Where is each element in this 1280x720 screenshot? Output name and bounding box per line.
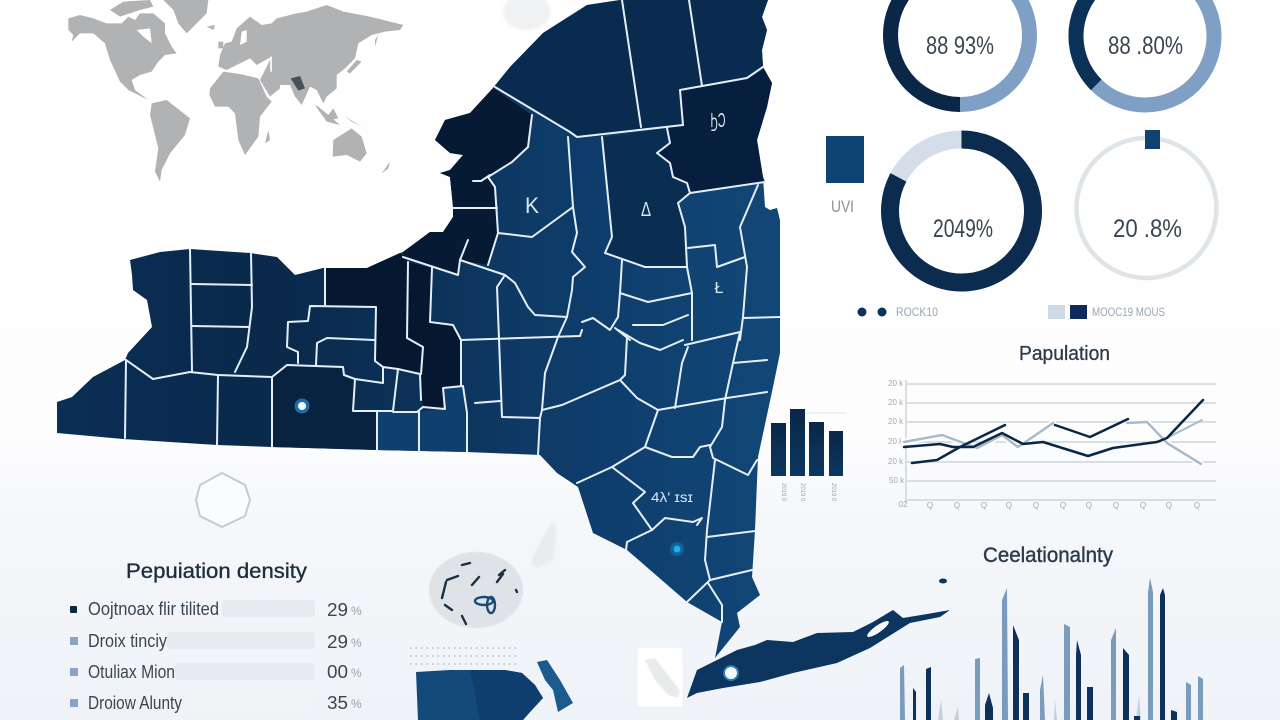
line chart: 20 k	[888, 417, 904, 426]
small bar chart: 2019 0	[780, 483, 786, 502]
gray blob inset map	[429, 520, 557, 628]
row 4: %	[351, 697, 362, 711]
line chart: Q	[1113, 501, 1119, 510]
donut 3 value: 2049%	[933, 215, 993, 243]
row 4: 35	[327, 693, 348, 713]
small inset card	[637, 647, 683, 707]
donut 1 value: 88 93%	[926, 32, 994, 60]
donut legend right: MOOC19 MOUS	[1092, 305, 1165, 319]
line chart: 20 k	[888, 379, 904, 388]
list title: Pepuiation density	[126, 560, 308, 583]
row 2: %	[351, 636, 362, 650]
row 4	[70, 693, 362, 713]
row 1	[70, 599, 362, 620]
county boundary lines	[125, 0, 780, 622]
line chart: 20 k	[888, 457, 904, 466]
map label small text: 4λ' ɪsɪ	[651, 489, 693, 505]
map label A: Δ	[641, 199, 651, 221]
small bar chart: 2019 0	[799, 483, 805, 502]
line chart: Q	[1060, 501, 1066, 510]
line chart: Q	[981, 501, 987, 510]
legend square label: UVI	[831, 197, 854, 216]
row 1: 29	[327, 600, 348, 620]
small bar chart	[771, 409, 846, 502]
map label L: Ł	[715, 280, 724, 297]
row 1: Oojtnoax flir tilited	[88, 599, 219, 619]
donut 1	[890, 0, 1030, 104]
row 1: %	[351, 604, 362, 618]
bottom bar chart title: Ceelationalnty	[983, 544, 1113, 567]
line chart: 20 k	[888, 398, 904, 407]
row 4: Droiow Alunty	[88, 693, 182, 713]
donut legend right	[1048, 305, 1165, 319]
line chart: Q	[1033, 501, 1039, 510]
line chart: Q	[1140, 501, 1146, 510]
line chart: 02	[899, 500, 908, 509]
line chart: 20 k	[888, 437, 904, 446]
row 2	[70, 631, 362, 652]
donut legend left	[858, 305, 938, 319]
marker west	[294, 398, 310, 414]
smudge near map top	[503, 0, 551, 30]
donut 2 value: 88 .80%	[1108, 32, 1183, 60]
bottom bar chart	[900, 578, 1203, 720]
line chart: Q	[1006, 501, 1012, 510]
New York county map	[57, 0, 780, 658]
donut 2	[1076, 0, 1214, 105]
dotted grid	[410, 648, 518, 664]
line chart: Q	[927, 501, 933, 510]
marker south	[670, 542, 684, 556]
row 3: 00	[327, 662, 348, 682]
donut 4	[1076, 130, 1216, 278]
Long Island	[687, 578, 950, 698]
donut legend left: ROCK10	[896, 305, 938, 319]
line chart: Q	[1194, 501, 1200, 510]
list: population rows	[70, 599, 362, 713]
row 3: Otuliax Mion	[88, 662, 175, 682]
row 2: 29	[327, 632, 348, 652]
hexagon outline icon	[196, 473, 250, 527]
marker Long Island	[723, 665, 739, 681]
small bar chart: 2019 0	[830, 483, 836, 502]
row 2: Droix tinciy	[88, 631, 167, 651]
row 3: %	[351, 666, 362, 680]
legend square	[826, 136, 864, 216]
line chart	[888, 379, 1216, 510]
inset blue map	[416, 660, 573, 720]
map label K: K	[525, 193, 539, 218]
donut 3	[890, 140, 1033, 282]
world map	[68, 0, 403, 182]
line chart: Q	[1086, 501, 1092, 510]
map label P: ϦϽ	[710, 110, 726, 132]
donut 4 value: 20 .8%	[1113, 215, 1182, 243]
row 3	[70, 662, 362, 682]
line chart: Q	[954, 501, 960, 510]
line chart: 50 k	[889, 476, 905, 485]
line chart: Q	[1166, 501, 1172, 510]
line chart title: Papulation	[1019, 343, 1110, 365]
